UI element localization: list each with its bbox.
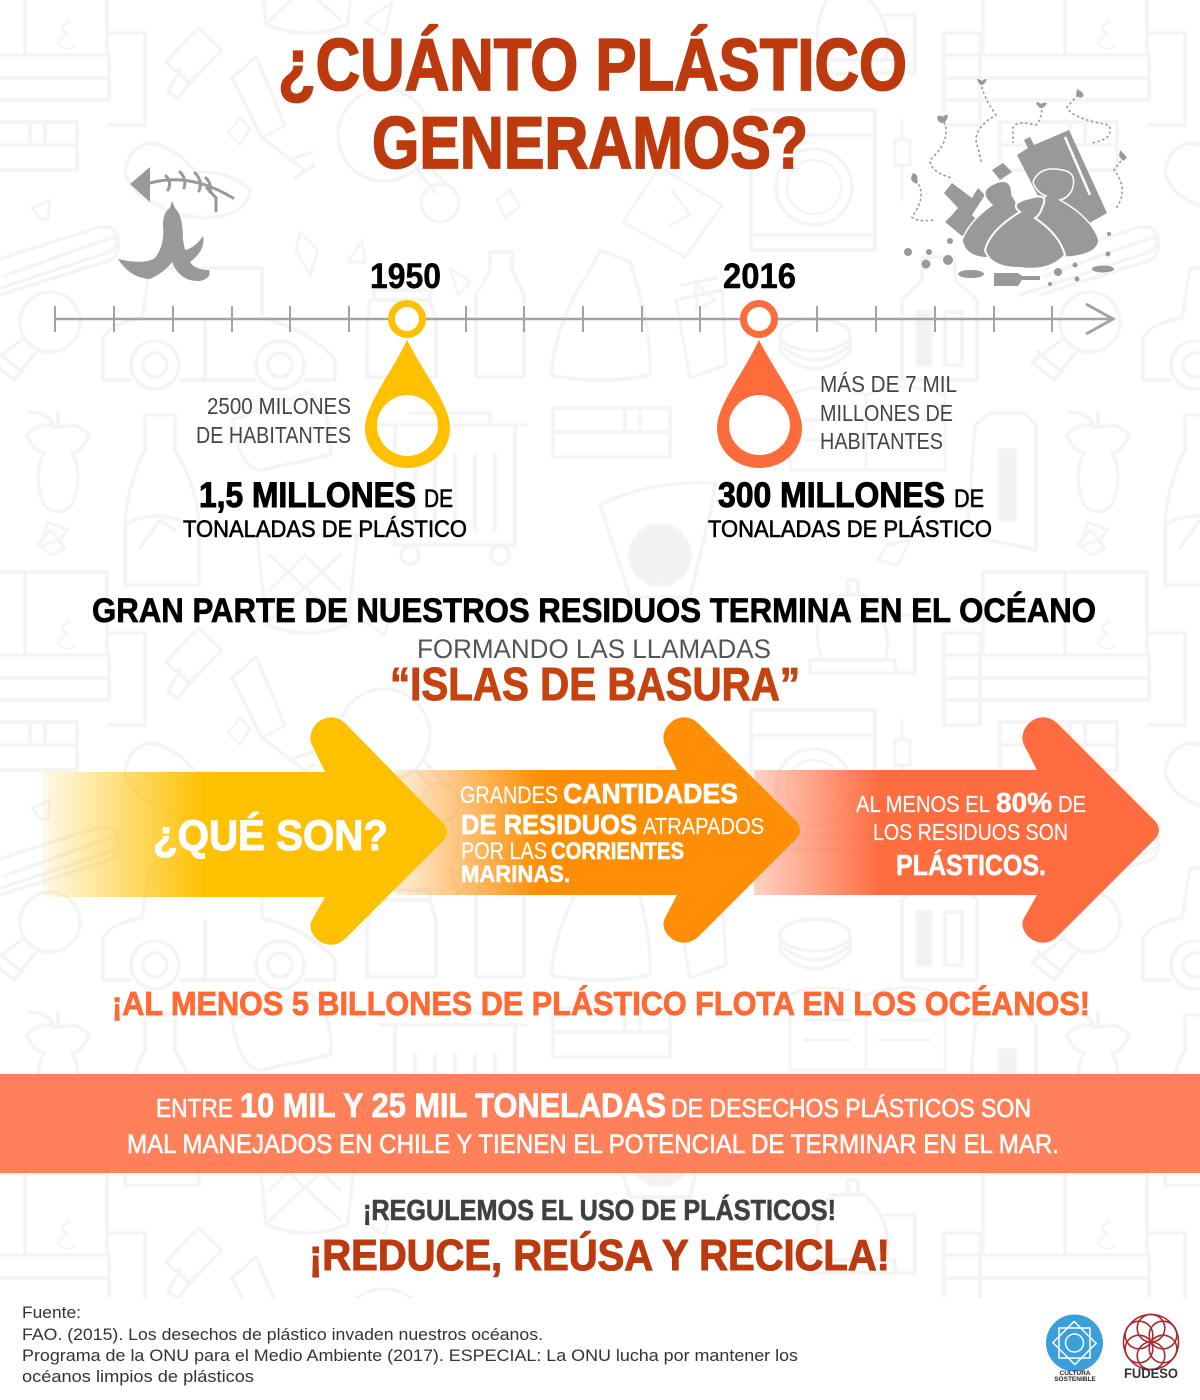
logo: Cultura Sostenible: SOSTENIBLE xyxy=(1054,1376,1096,1383)
text: 1950 plastic: TONALADAS DE PLÁSTICO xyxy=(183,516,467,543)
subheading: FORMANDO LAS LLAMADAS xyxy=(417,634,771,664)
text: 2016 population: MILLONES DE xyxy=(820,400,953,426)
title: GENERAMOS? xyxy=(372,103,808,184)
banner: Chile waste xyxy=(0,1074,1200,1173)
year: 1950: 1950 xyxy=(370,257,441,296)
arrow: third, plastics share: PLÁSTICOS. xyxy=(896,848,1046,882)
logo: FUDESO: FUDESO xyxy=(1124,1365,1178,1381)
arrow: third, plastics share xyxy=(754,717,1159,943)
sources xyxy=(22,1303,798,1386)
text: 1950 plastic: DE xyxy=(424,485,453,513)
arrow: second, definition: CANTIDADES xyxy=(563,778,738,809)
text: 2016 plastic: TONALADAS DE PLÁSTICO xyxy=(708,516,992,543)
heading: ocean waste: GRAN PARTE DE NUESTROS RESIDUOS TERMINA EN EL OCÉANO xyxy=(92,592,1096,630)
logo: FUDESO xyxy=(1124,1314,1178,1381)
text: 2016 plastic: DE xyxy=(954,485,984,513)
arrow: third, plastics share: AL MENOS EL xyxy=(856,791,990,817)
arrow: first, question xyxy=(42,717,447,945)
arrow: second, definition xyxy=(395,717,800,943)
timeline arrow xyxy=(55,304,1113,334)
sources: Fuente: xyxy=(22,1303,81,1322)
text: 2016 population: MÁS DE 7 MIL xyxy=(820,371,957,397)
title xyxy=(278,25,907,184)
text: 2016 plastic: 300 MILLONES xyxy=(718,476,945,515)
text: 2016 population xyxy=(820,371,957,454)
sources: océanos limpios de plásticos xyxy=(22,1367,254,1386)
sources: Programa de la ONU para el Medio Ambiente (2017). ESPECIAL: La ONU lucha por mantener los xyxy=(22,1346,798,1365)
logo: Cultura Sostenible xyxy=(1046,1314,1103,1383)
text: 2016 population: HABITANTES xyxy=(820,428,943,454)
call to action: regulate: ¡REGULEMOS EL USO DE PLÁSTICOS! xyxy=(363,1193,836,1227)
callout: floating plastic: ¡AL MENOS 5 BILLONES DE PLÁSTICO FLOTA EN LOS OCÉANOS! xyxy=(112,985,1090,1022)
arrow: third, plastics share: 80% xyxy=(996,787,1052,818)
title: ¿CUÁNTO PLÁSTICO xyxy=(278,25,907,106)
arrow: second, definition: MARINAS. xyxy=(461,861,570,888)
call to action: reduce reuse recycle: ¡REDUCE, REÚSA Y RECICLA! xyxy=(309,1230,890,1280)
icon: garbage pile xyxy=(904,79,1127,286)
arrow: second, definition: DE RESIDUOS xyxy=(461,809,637,840)
arrow: second, definition: CORRIENTES xyxy=(551,838,684,865)
text: 1950 population xyxy=(196,393,351,448)
text: 1950 population: DE HABITANTES xyxy=(196,422,351,448)
banner: Chile waste: 10 MIL Y 25 MIL TONELADAS xyxy=(240,1087,666,1125)
arrow: third, plastics share: DE xyxy=(1058,791,1086,817)
banner: Chile waste: DE DESECHOS PLÁSTICOS SON xyxy=(671,1093,1031,1123)
text: 1950 population: 2500 MILONES xyxy=(207,393,351,419)
arrow: second, definition: GRANDES xyxy=(460,782,558,809)
text: 1950 plastic xyxy=(183,476,467,543)
text: 1950 plastic: 1,5 MILLONES xyxy=(199,476,416,515)
banner: Chile waste: MAL MANEJADOS EN CHILE Y TIENEN EL POTENCIAL DE TERMINAR EN EL MAR. xyxy=(127,1129,1059,1159)
banner: Chile waste: ENTRE xyxy=(156,1093,233,1123)
marker: 1950 drop xyxy=(365,304,450,468)
heading: islas de basura: “ISLAS DE BASURA” xyxy=(390,658,800,710)
arrow: third, plastics share: LOS RESIDUOS SON xyxy=(873,819,1068,845)
text: 2016 plastic xyxy=(708,476,992,543)
logo: Cultura Sostenible: CULTURA xyxy=(1060,1370,1091,1377)
arrow: first, question: ¿QUÉ SON? xyxy=(153,812,388,860)
sources: FAO. (2015). Los desechos de plástico invaden nuestros océanos. xyxy=(22,1325,543,1344)
arrow: second, definition: ATRAPADOS xyxy=(643,813,764,839)
arrow: second, definition: POR LAS xyxy=(461,838,547,865)
year: 2016: 2016 xyxy=(723,257,796,296)
marker: 2016 drop xyxy=(717,304,802,468)
icon: fish bone and banana peel xyxy=(118,167,233,281)
